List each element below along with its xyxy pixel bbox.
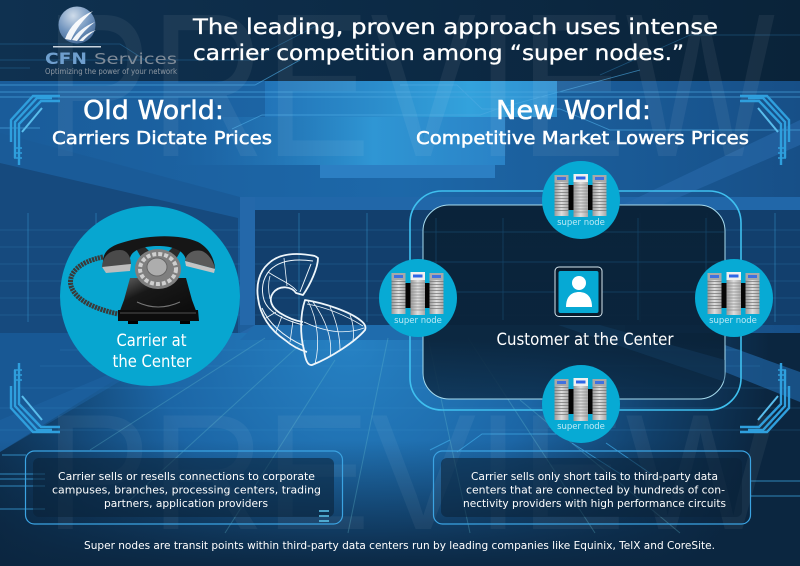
heading: old world: Old World: xyxy=(83,96,224,126)
title: The leading, proven approach uses intense xyxy=(192,15,718,39)
inner loop xyxy=(423,205,725,399)
preview watermark bottom: PREVIEW xyxy=(45,380,775,564)
logo: Services xyxy=(94,50,177,68)
carrier label: the Center xyxy=(112,352,192,372)
heading: old world xyxy=(52,96,272,149)
super node bottom: super node xyxy=(557,422,605,432)
corner ornament top left xyxy=(11,96,60,165)
heading: new world xyxy=(416,96,749,149)
customer label: Customer at the Center xyxy=(496,330,674,349)
logo name: CFN xyxy=(45,49,87,68)
carrier label xyxy=(112,331,192,372)
panel: new world description: Carrier sells only short tails to third-party data xyxy=(471,471,718,483)
corner ornament bottom right xyxy=(740,363,789,432)
heading: old world: Carriers Dictate Prices xyxy=(52,128,272,149)
corner ornament top right xyxy=(740,96,789,165)
panel: old world description: campuses, branches, processing centers, trading xyxy=(52,484,321,496)
super node right: super node xyxy=(709,316,757,326)
outer loop xyxy=(410,191,741,410)
icon: customer xyxy=(555,267,602,316)
panel: old world description: Carrier sells or resells connections to corporate xyxy=(58,471,315,483)
panel: old world description xyxy=(26,451,342,524)
arrow: wireframe transition xyxy=(257,254,365,365)
logo tagline: Optimizing the power of your network xyxy=(45,67,178,76)
super node left xyxy=(379,259,457,337)
footer note: Super nodes are transit points within third-party data centers run by leading companies like Equinix, TelX and CoreSite. xyxy=(84,540,715,552)
icon: telephone xyxy=(70,236,215,324)
panel: new world description xyxy=(434,451,750,524)
carrier label: Carrier at xyxy=(116,331,187,351)
panel: old world description: partners, application providers xyxy=(104,498,268,510)
super node right xyxy=(695,259,773,337)
corner ornament bottom left xyxy=(11,363,60,432)
panel: new world description: nectivity providers with high performance circuits xyxy=(463,498,726,510)
title xyxy=(192,15,718,65)
super node bottom xyxy=(542,365,620,443)
logo xyxy=(45,6,178,76)
logo sphere xyxy=(58,6,96,44)
super node top xyxy=(542,161,620,239)
heading: new world: New World: xyxy=(496,96,651,126)
panel: carrier at the center xyxy=(60,206,240,386)
heading: new world: Competitive Market Lowers Prices xyxy=(416,128,749,149)
panel: super node network xyxy=(379,161,773,443)
title: carrier competition among “super nodes.” xyxy=(193,41,684,65)
panel: new world description: centers that are connected by hundreds of con- xyxy=(466,484,725,496)
super node left: super node xyxy=(394,316,442,326)
super node top: super node xyxy=(557,218,605,228)
